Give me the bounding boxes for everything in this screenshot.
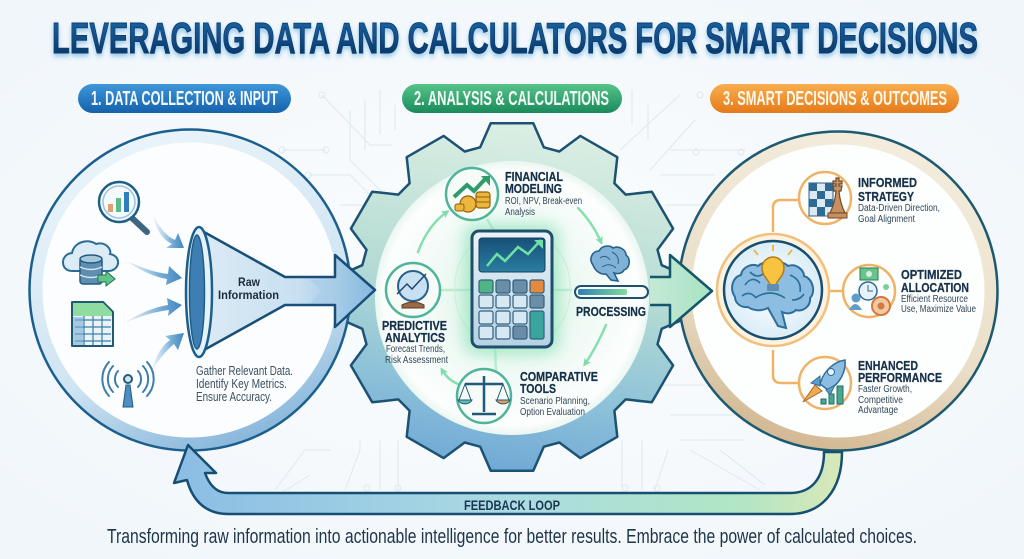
gear inner disc [375, 161, 649, 435]
text: optimized allocation [901, 267, 976, 315]
text: data collection notes: Gather Relevant Data. [196, 364, 293, 378]
arrow: gear to decisions [650, 255, 712, 327]
arrow: feedback loop: FEEDBACK LOOP [464, 498, 560, 513]
icon: small brain [591, 246, 629, 281]
heading: step 2 [402, 84, 622, 113]
connectors: brain to outcomes [773, 200, 843, 383]
panel: decisions circle [678, 132, 998, 450]
arrow: feedback loop [174, 445, 842, 514]
icon: cloud database [63, 241, 118, 286]
icon: spreadsheet [72, 302, 113, 346]
text: financial modeling: MODELING [505, 181, 562, 196]
text: optimized allocation: Efficient Resource [901, 294, 968, 305]
text: predictive analytics: Risk Assessment [385, 355, 448, 366]
text: financial modeling [505, 169, 582, 218]
text: data collection notes: Ensure Accuracy. [196, 390, 272, 404]
text: comparative tools: COMPARATIVE [520, 369, 598, 384]
progress: processing: PROCESSING [576, 304, 646, 319]
text: comparative tools: TOOLS [520, 381, 556, 396]
green process arrows [418, 208, 606, 384]
text: comparative tools [520, 369, 598, 418]
node: predictive analytics [386, 263, 440, 317]
text: enhanced performance: Competitive [858, 395, 903, 406]
node: optimized allocation [843, 265, 895, 317]
progress: processing [575, 286, 648, 319]
label: raw information: Raw [238, 275, 261, 289]
text: informed strategy: Goal Alignment [858, 214, 915, 225]
text: predictive analytics [382, 318, 448, 366]
text: predictive analytics: ANALYTICS [385, 330, 445, 345]
text: informed strategy: INFORMED [858, 175, 917, 190]
panel: data collection circle [30, 130, 350, 450]
text: enhanced performance: ENHANCED [858, 358, 918, 373]
text: data collection notes: Identify Key Metrics. [196, 377, 287, 391]
node: informed strategy [799, 172, 851, 224]
text: financial modeling: Analysis [505, 207, 535, 218]
node: financial modeling [446, 168, 498, 220]
text: enhanced performance: PERFORMANCE [858, 370, 942, 385]
node: comparative tools [457, 369, 511, 423]
heading: step 2: 2. ANALYSIS & CALCULATIONS [414, 88, 609, 110]
text: financial modeling: FINANCIAL [505, 169, 563, 184]
heading: step 1 [78, 84, 291, 113]
arrows: inputs into funnel [124, 215, 184, 370]
icon: magnifier with bars [99, 182, 147, 232]
panel: analysis gear [338, 123, 686, 471]
heading: step 3 [710, 84, 959, 113]
text: informed strategy: Data-Driven Direction, [858, 203, 940, 214]
icon: calculator [463, 223, 560, 355]
icon: antenna signal [102, 362, 154, 407]
text: financial modeling: ROI, NPV, Break-even [505, 196, 582, 207]
text: optimized allocation: ALLOCATION [901, 280, 969, 295]
text: optimized allocation: Use, Maximize Value [901, 304, 976, 315]
text: informed strategy [858, 175, 940, 225]
text: enhanced performance: Advantage [858, 405, 898, 416]
text: predictive analytics: PREDICTIVE [382, 318, 447, 333]
connectors: calculator spokes [440, 219, 572, 371]
text: informed strategy: STRATEGY [858, 189, 914, 204]
text: comparative tools: Option Evaluation [520, 407, 585, 418]
gear body [338, 123, 686, 471]
text: predictive analytics: Forecast Trends, [386, 344, 445, 355]
label: raw information: Information [218, 288, 279, 302]
icon: brain with light bulb [717, 234, 829, 346]
arrow body [204, 232, 375, 350]
funnel with blue arrow [186, 227, 375, 357]
text: optimized allocation: OPTIMIZED [901, 267, 962, 282]
text: enhanced performance: Faster Growth, [858, 384, 912, 395]
text: comparative tools: Scenario Planning, [520, 396, 590, 407]
node: enhanced performance [799, 357, 851, 409]
heading: step 1: 1. DATA COLLECTION & INPUT [91, 88, 278, 110]
text: enhanced performance [858, 358, 942, 416]
text: data collection notes [196, 364, 293, 404]
